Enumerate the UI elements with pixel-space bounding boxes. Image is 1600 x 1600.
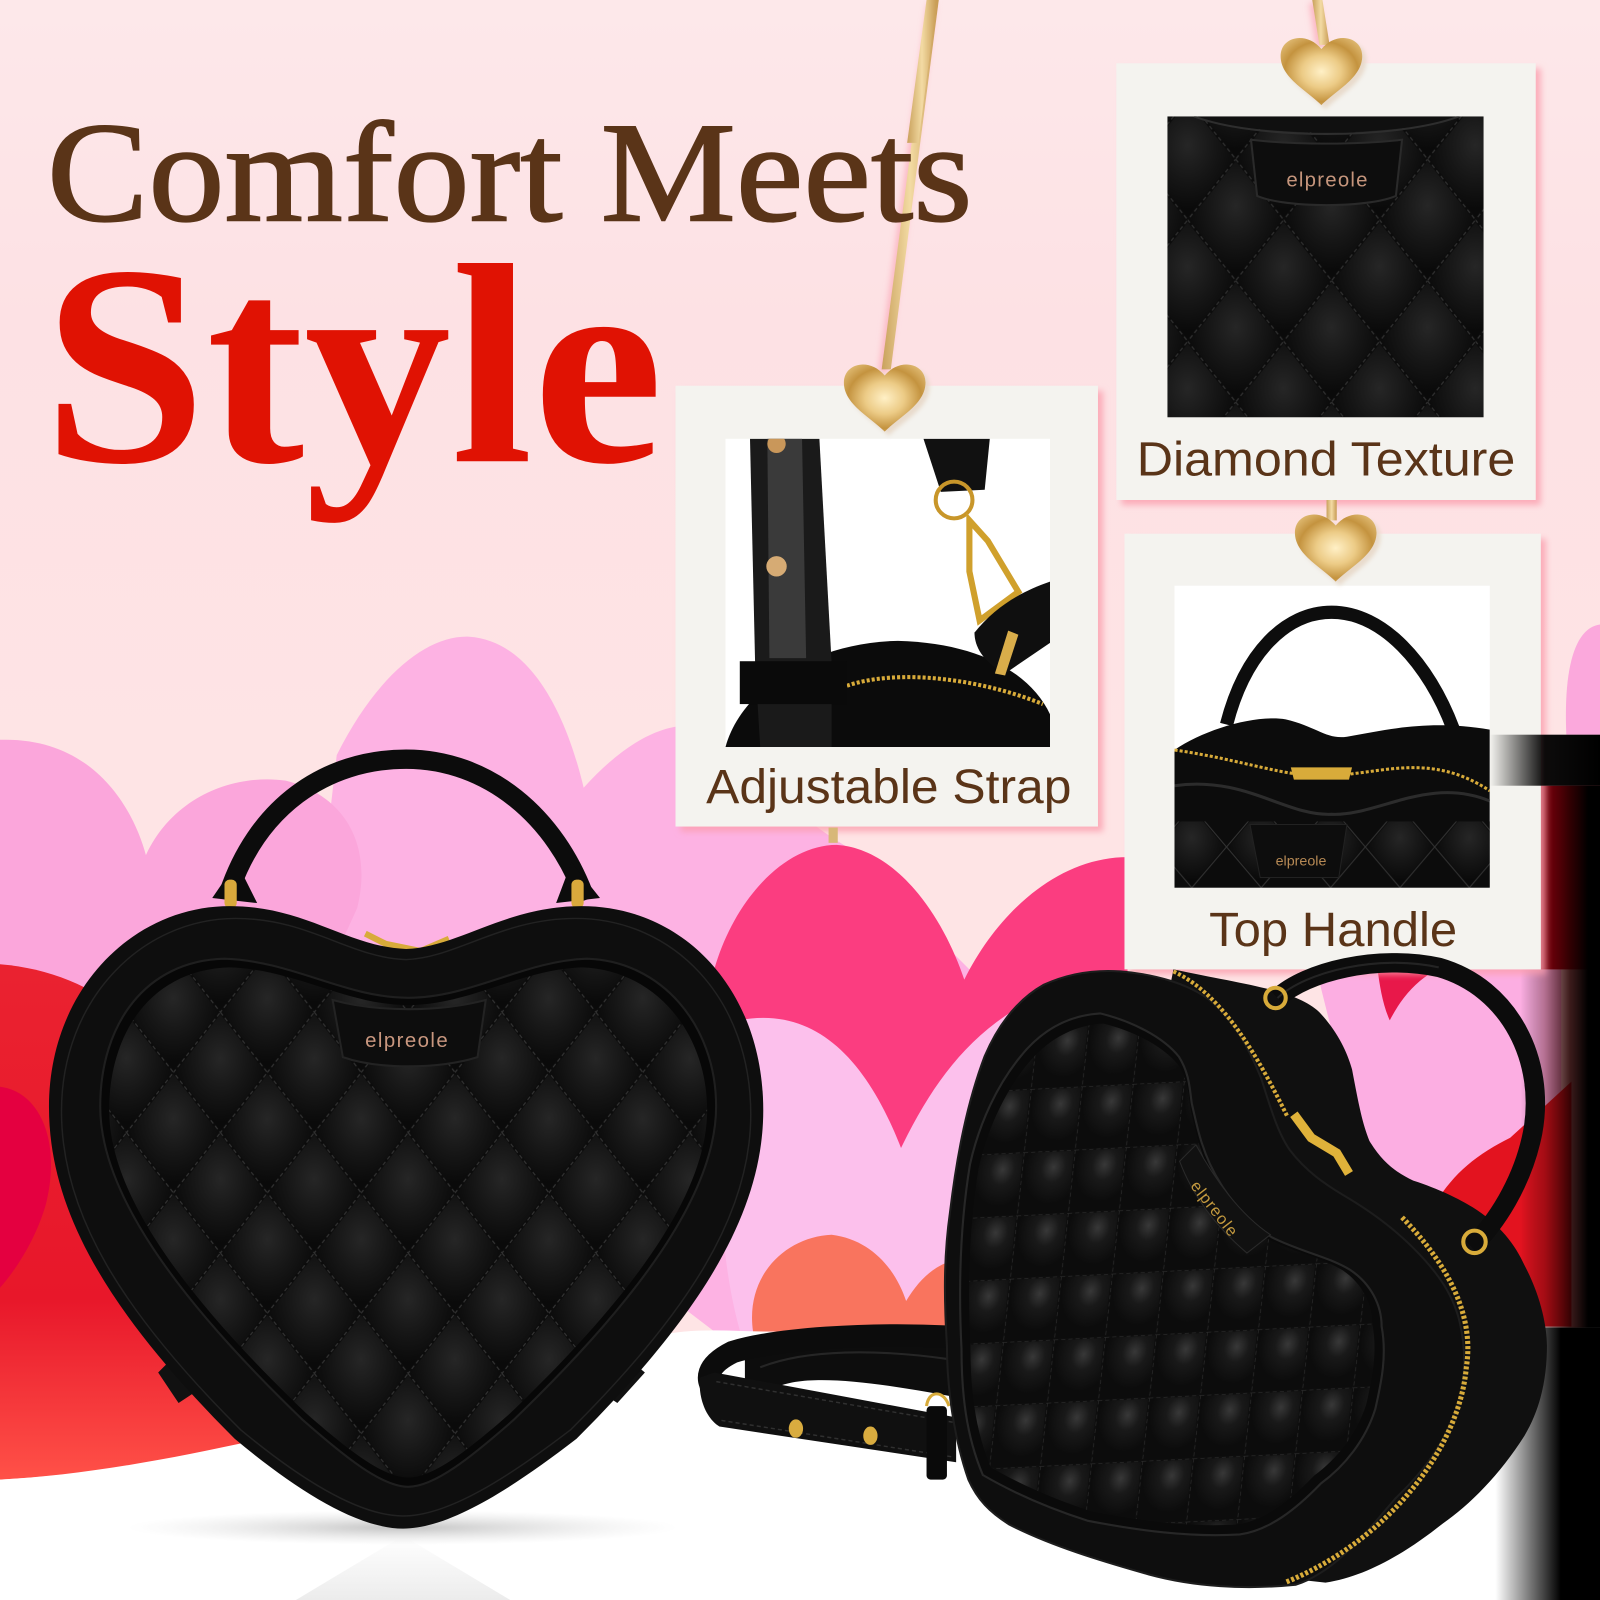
title: Style xyxy=(43,206,663,524)
photo: handle detail: elpreole xyxy=(1276,853,1326,869)
string stub below strap panel xyxy=(829,828,838,843)
photo: handle detail xyxy=(1174,612,1490,888)
bag: front view: elpreole xyxy=(365,1030,449,1052)
body xyxy=(49,906,763,1529)
panel: top handle xyxy=(1124,534,1541,969)
handle xyxy=(227,759,586,900)
string over title xyxy=(907,0,937,143)
floor reflection xyxy=(128,1510,679,1600)
zipper pull xyxy=(365,934,449,951)
bag: angled view: elpreole xyxy=(1187,1178,1242,1241)
stud xyxy=(789,1419,803,1438)
gold heart: diamond texture xyxy=(1281,38,1362,105)
dark gradient block, behind panel xyxy=(1469,786,1600,1600)
quilting xyxy=(969,1023,1375,1525)
gold heart: adjustable strap xyxy=(844,364,926,432)
title: Comfort Meets xyxy=(47,93,972,251)
back body xyxy=(1122,969,1547,1583)
front rim xyxy=(945,971,1464,1587)
zipper top xyxy=(1173,971,1288,1117)
label: Diamond Texture xyxy=(1137,434,1515,487)
white floor xyxy=(0,1328,1600,1600)
title xyxy=(43,93,972,524)
label: Adjustable Strap xyxy=(706,761,1071,814)
panel: adjustable strap xyxy=(676,386,1098,827)
photo: strap detail xyxy=(726,435,1050,747)
handle xyxy=(1278,963,1535,1247)
panel: diamond texture xyxy=(1116,63,1536,500)
quilt border xyxy=(100,959,716,1487)
black gradient strip over panel xyxy=(1490,735,1600,786)
string: adjustable strap xyxy=(882,0,939,369)
shoulder strap coil xyxy=(700,1332,956,1480)
photo: quilted texture xyxy=(1167,116,1484,417)
logo tab xyxy=(333,1000,486,1066)
handle rings xyxy=(1265,988,1286,1008)
string: diamond heart xyxy=(1312,0,1330,45)
studs xyxy=(224,880,237,908)
rim stitch line xyxy=(61,918,751,1516)
logo tab xyxy=(1180,1145,1270,1253)
background paper hearts xyxy=(0,624,1600,1480)
zipper side xyxy=(1285,1217,1468,1583)
stud xyxy=(863,1427,878,1445)
zipper pull xyxy=(1294,1114,1349,1173)
gold heart: top handle xyxy=(1295,514,1377,582)
strap tabs xyxy=(158,1362,645,1403)
photo: quilted texture: elpreole xyxy=(1286,170,1369,192)
label: Top Handle xyxy=(1209,904,1457,957)
quilting xyxy=(109,967,707,1478)
bag: front view xyxy=(49,759,763,1529)
inner rim xyxy=(960,1013,1384,1535)
bag: angled view xyxy=(945,963,1547,1587)
string: top handle heart xyxy=(1327,500,1337,520)
